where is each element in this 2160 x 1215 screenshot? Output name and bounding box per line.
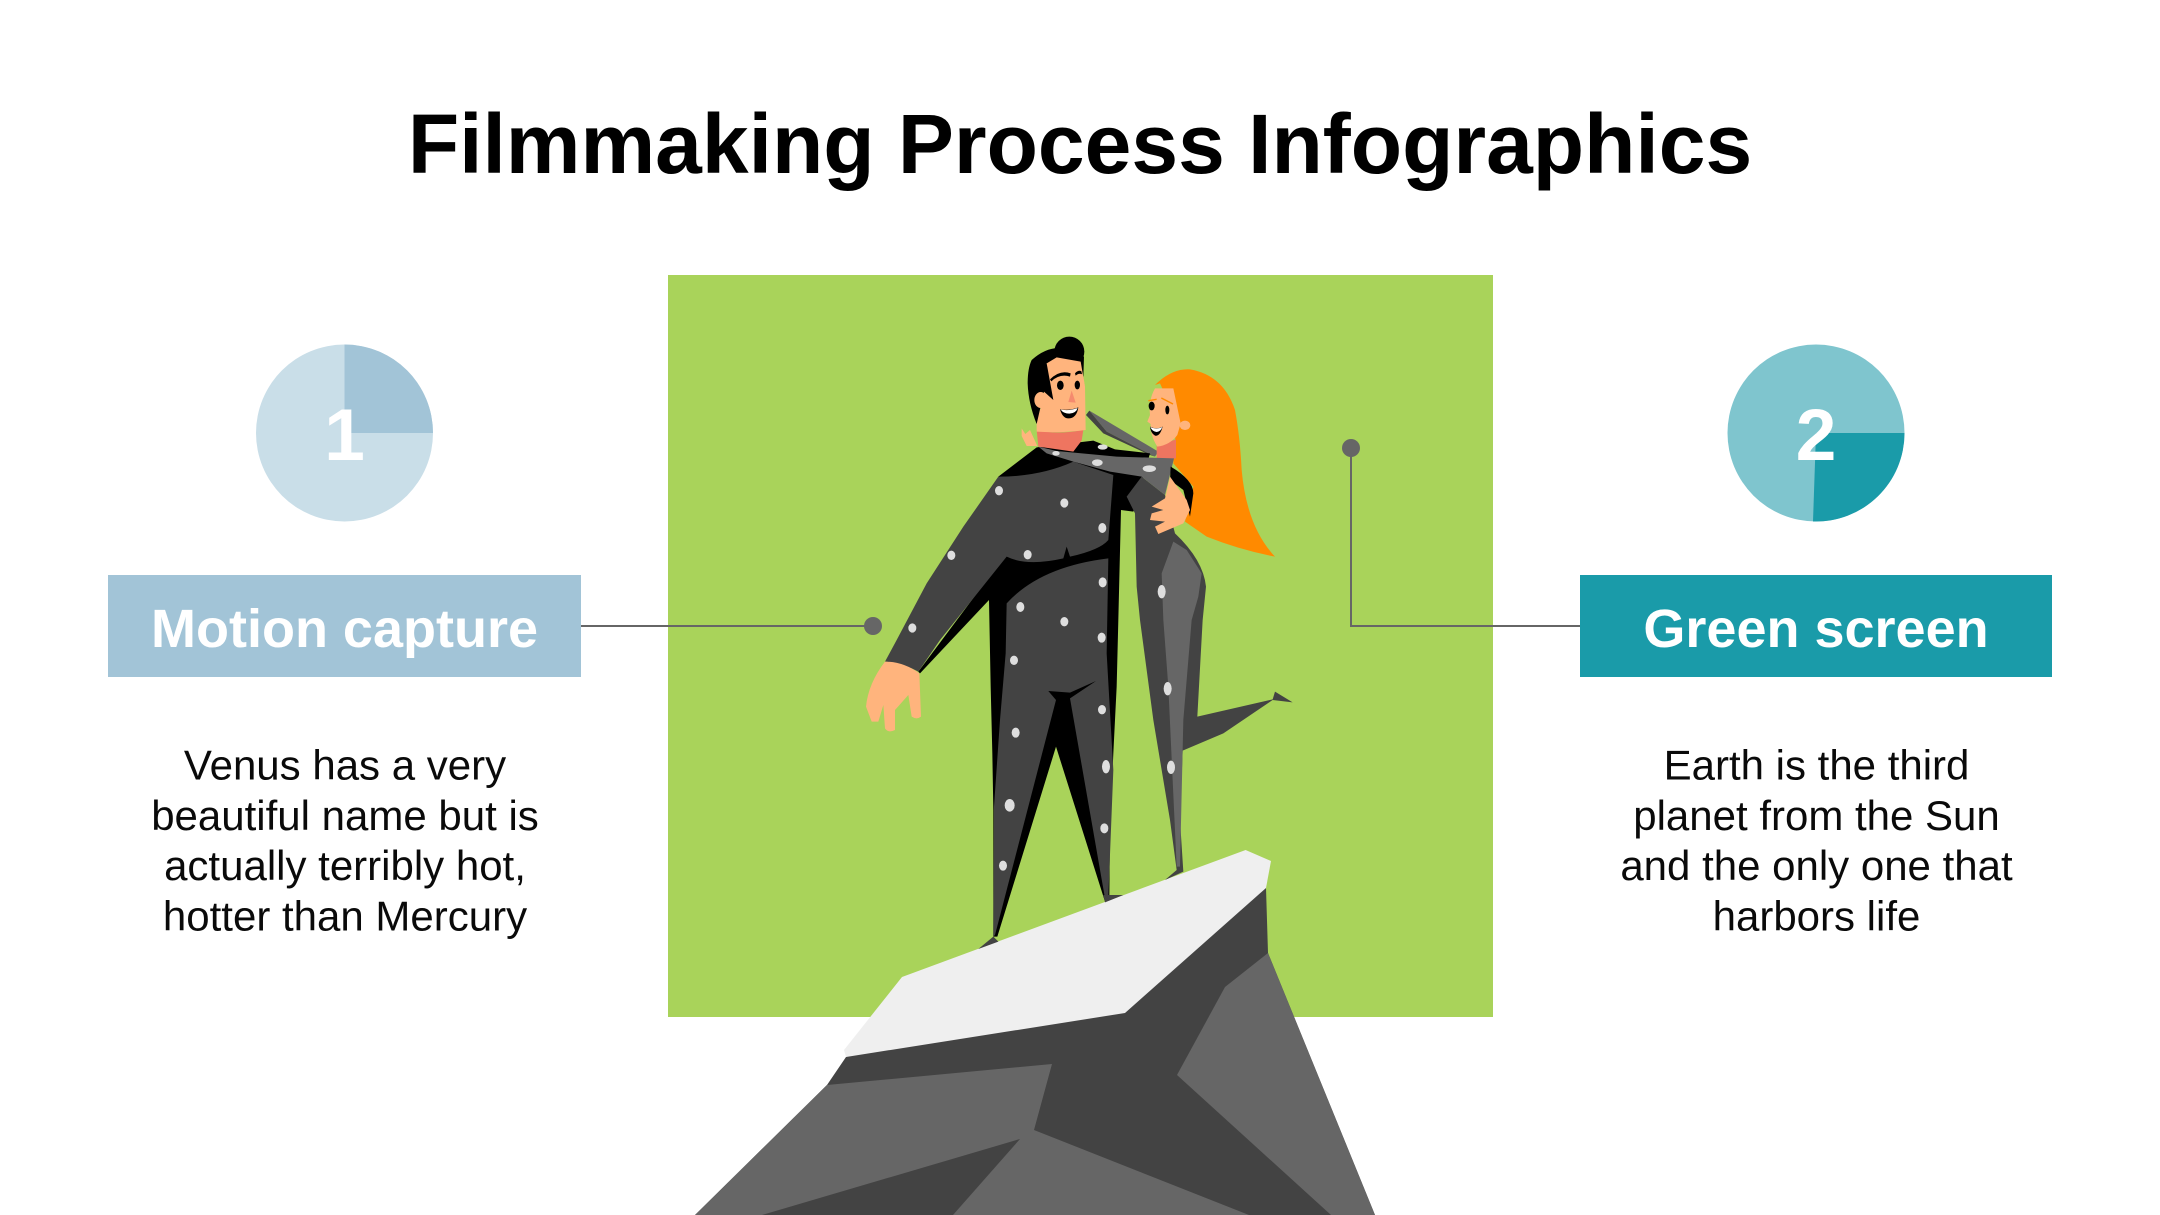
step 2: description: Earth is the third xyxy=(1664,742,1969,788)
mocap markers xyxy=(908,444,1175,871)
step 1: description: Venus has a very xyxy=(184,742,506,788)
step 1: description: beautiful name but is xyxy=(151,792,539,839)
step 1: description: hotter than Mercury xyxy=(163,892,527,940)
step 2: description: and the only one that xyxy=(1620,842,2013,889)
man: small hand behind shoulder xyxy=(1022,428,1037,446)
right connector line with dot xyxy=(1342,439,1580,626)
step 2: label xyxy=(1580,575,2052,677)
step 1: pie badge xyxy=(256,344,433,522)
woman: arm across man's shoulders xyxy=(1038,447,1174,495)
step 2: description: harbors life xyxy=(1713,892,1920,940)
step 2: pie badge: 2 xyxy=(1796,395,1836,476)
woman: arm behind man's neck xyxy=(1086,411,1158,457)
man: upper torso and arm xyxy=(885,462,1113,672)
man: face xyxy=(1037,362,1086,432)
illustration: mountain rock xyxy=(695,850,1375,1215)
man: feet xyxy=(978,895,1123,949)
left connector line with dot xyxy=(581,617,882,635)
step 2: pie badge xyxy=(1728,344,1905,522)
illustration: couple in motion capture suits xyxy=(866,337,1293,949)
step 2: description: planet from the Sun xyxy=(1633,792,2000,839)
man: hair xyxy=(1028,337,1085,424)
step 1: description: actually terribly hot, xyxy=(164,842,526,889)
man: large hand xyxy=(866,662,921,731)
woman: lighter suit panel xyxy=(1162,542,1202,867)
step 1: label xyxy=(108,575,581,677)
title: Filmmaking Process Infographics xyxy=(408,97,1752,191)
man: hand on woman's waist xyxy=(1150,477,1190,534)
man: neck xyxy=(1037,430,1083,452)
woman: face xyxy=(1147,388,1190,447)
step 1: label: Motion capture xyxy=(151,599,538,659)
woman: body and raised leg xyxy=(1127,477,1293,880)
woman: hair xyxy=(1155,369,1275,557)
man: lower torso and legs xyxy=(993,558,1113,937)
step 2: label: Green screen xyxy=(1643,599,1989,659)
woman: neck xyxy=(1157,439,1176,461)
man: black sleeve behind hand xyxy=(1170,467,1193,517)
step 1: pie badge: 1 xyxy=(324,395,365,476)
man: black suit silhouette xyxy=(918,441,1150,937)
panel: green screen backdrop xyxy=(668,275,1493,1017)
